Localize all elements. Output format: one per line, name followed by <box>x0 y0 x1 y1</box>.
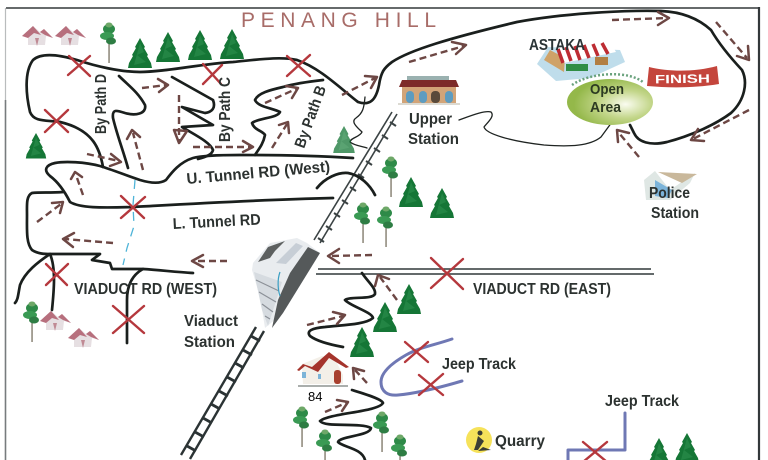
northern main road <box>27 11 745 167</box>
jeep track label two: Jeep Track <box>605 393 679 410</box>
by path C road <box>172 77 214 159</box>
upper tunnel road label: U. Tunnel RD (West) <box>186 158 331 188</box>
upper station label: Station <box>408 131 459 148</box>
finish banner <box>647 66 719 87</box>
no-entry crosses <box>45 55 607 460</box>
viaduct road east label: VIADUCT RD (EAST) <box>473 281 611 298</box>
tunnel arc <box>317 173 375 195</box>
jeep track label one: Jeep Track <box>442 356 516 373</box>
blue dashed stream <box>123 180 135 265</box>
thin squiggle by upper station <box>350 97 367 148</box>
police station <box>644 171 699 222</box>
lower tunnel road and viaduct road west <box>27 192 193 273</box>
railway upper section <box>314 112 397 243</box>
open area: Area <box>590 99 622 116</box>
viaduct road east <box>316 269 654 274</box>
viaduct station label: Station <box>184 334 235 351</box>
by path B road <box>252 80 323 155</box>
finish banner: FINISH <box>655 71 710 86</box>
by path C label: By Path C <box>217 77 234 142</box>
funicular train <box>252 238 320 328</box>
red roof house <box>297 352 349 386</box>
railway lower section <box>181 327 264 459</box>
upper station building <box>398 76 460 104</box>
viaduct station label <box>184 313 238 351</box>
upper tunnel road <box>46 155 353 207</box>
thin road to open area <box>459 112 612 146</box>
jeep track one <box>381 339 462 395</box>
houses north west <box>22 26 86 46</box>
open area: Open <box>590 81 624 98</box>
houses south west <box>40 311 99 348</box>
viaduct station label: Viaduct <box>184 313 238 330</box>
jeep track two <box>568 413 625 460</box>
police station: Station <box>651 205 699 222</box>
page number 84: 84 <box>308 389 322 404</box>
astaka label: ASTAKA <box>529 37 585 54</box>
by path D road <box>113 76 145 168</box>
astaka pavilion <box>537 43 625 81</box>
zigzag road south lower <box>320 390 383 460</box>
upper station label <box>408 111 459 148</box>
police station: Police <box>649 185 690 202</box>
title: PENANG HILL <box>241 9 436 32</box>
icon: quarry worker <box>466 427 492 453</box>
zigzag road south upper <box>309 273 375 347</box>
quarry label: Quarry <box>495 433 545 450</box>
viaduct road branches <box>15 254 143 343</box>
upper station label: Upper <box>409 111 452 128</box>
by path B label: By Path B <box>292 83 330 150</box>
by path D label: By Path D <box>93 74 110 134</box>
pine trees <box>23 22 407 460</box>
open area <box>567 74 653 125</box>
lower tunnel road label: L. Tunnel RD <box>172 211 261 233</box>
viaduct road west label: VIADUCT RD (WEST) <box>74 281 217 298</box>
